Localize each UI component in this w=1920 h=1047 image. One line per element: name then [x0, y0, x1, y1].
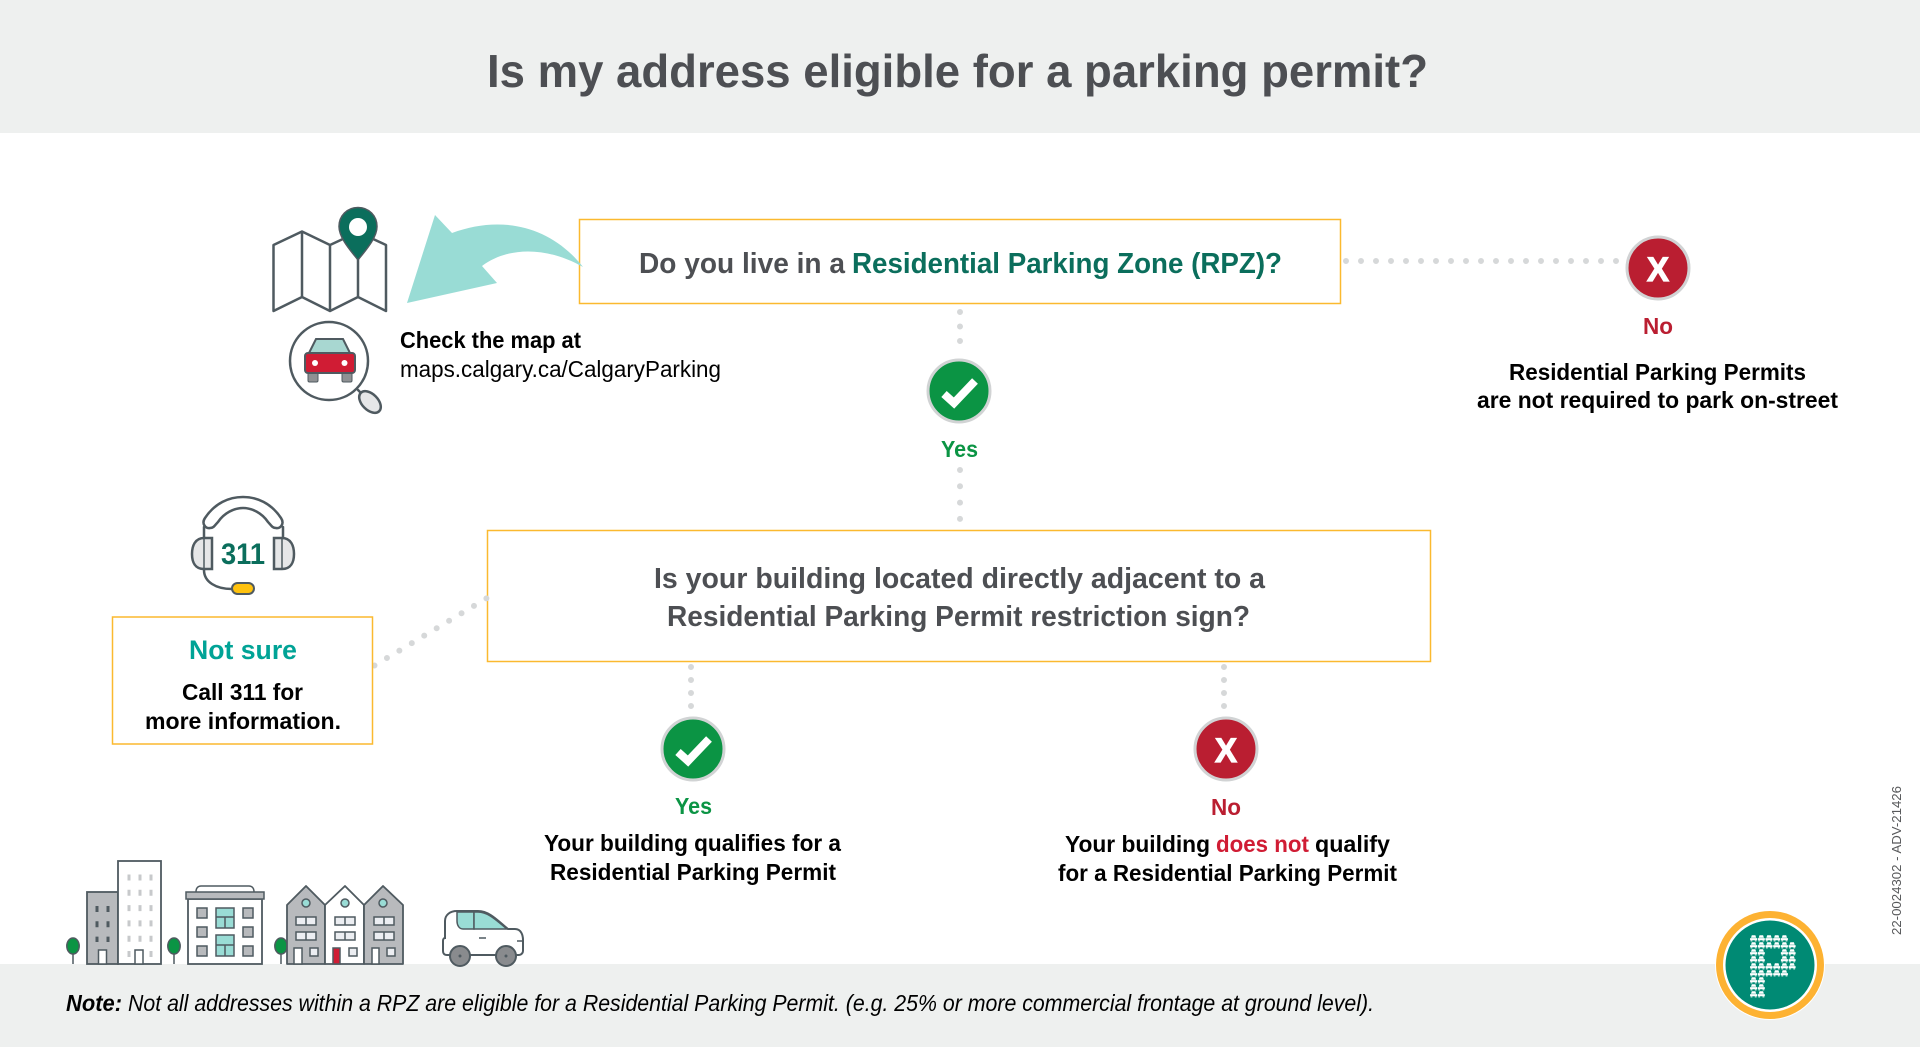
connector: RPZ box to No — [1346, 258, 1618, 264]
label: yes: Yes — [675, 793, 712, 819]
icon: magnifier with red car — [290, 322, 385, 417]
connector: building box to No — [1221, 667, 1227, 707]
question box: RPZ — [580, 220, 1340, 304]
qualifies text: Residential Parking Permit — [550, 859, 836, 885]
icon: 311 headset: 311 — [221, 538, 265, 571]
icon: folded map with pin — [274, 208, 386, 311]
note text: Note: — [66, 990, 122, 1016]
map instruction text: Check the map at — [400, 327, 581, 353]
icon: no cross — [1627, 237, 1689, 299]
question text: Is your building located directly adjacent to a — [654, 563, 1266, 595]
does not qualify text: for a Residential Parking Permit — [1058, 860, 1397, 886]
label: no: No — [1211, 794, 1241, 820]
does not qualify text — [1058, 831, 1397, 886]
no outcome text: are not required to park on-street — [1477, 387, 1838, 413]
question text: Residential Parking Zone (RPZ)? — [852, 248, 1282, 280]
question text — [654, 563, 1266, 633]
map instruction text: maps.calgary.ca/CalgaryParking — [400, 356, 721, 382]
icon: yes check — [662, 718, 724, 780]
question box: restriction sign — [488, 530, 1430, 662]
does not qualify text: qualify — [1315, 831, 1390, 857]
connector: Yes to building box — [957, 470, 963, 520]
not sure heading: Not sure — [189, 635, 297, 665]
icon: curved arrow to map — [407, 215, 583, 303]
does not qualify text: Your building — [1065, 831, 1210, 857]
header band — [0, 0, 1920, 133]
connector: building box to Yes — [688, 667, 694, 707]
title: Is my address eligible for a parking permit? — [487, 45, 1428, 97]
car mosaic letter P — [1750, 935, 1796, 997]
not sure text: more information. — [145, 708, 341, 734]
icon: no cross: X — [1215, 732, 1237, 770]
label: yes: Yes — [941, 436, 978, 462]
document code: 22-0024302 - ADV-21426 — [1889, 786, 1904, 935]
illustration: buildings and trees — [67, 861, 403, 964]
logo: parking P of cars — [1715, 910, 1825, 1020]
qualifies text — [544, 830, 841, 885]
apartment block — [186, 886, 264, 964]
question text: Do you live in a — [639, 248, 846, 280]
panel: not sure — [112, 617, 372, 744]
question text: Residential Parking Permit restriction sign? — [667, 601, 1250, 633]
icon: no cross: X — [1647, 251, 1669, 289]
map instruction text — [400, 327, 721, 382]
icon: 311 headset — [192, 497, 294, 594]
no outcome text: Residential Parking Permits — [1509, 359, 1806, 385]
row houses — [287, 886, 403, 964]
footer band — [0, 964, 1920, 1047]
icon: yes check — [928, 360, 990, 422]
tower block — [87, 861, 161, 964]
illustration: white car — [443, 911, 523, 966]
does not qualify text: does not — [1216, 831, 1309, 857]
not sure text — [145, 679, 341, 734]
label: no: No — [1643, 313, 1673, 339]
connector: RPZ box to Yes — [957, 312, 963, 343]
connector: building box to not sure — [374, 598, 487, 666]
note text: Not all addresses within a RPZ are eligible for a Residential Parking Permit. (e.g. 25% or more commercial frontage at ground level). — [128, 990, 1374, 1016]
qualifies text: Your building qualifies for a — [544, 830, 841, 856]
not sure text: Call 311 for — [182, 679, 303, 705]
no outcome text — [1477, 359, 1838, 413]
icon: no cross — [1195, 718, 1257, 780]
trees — [67, 938, 287, 964]
question text — [639, 248, 1282, 280]
